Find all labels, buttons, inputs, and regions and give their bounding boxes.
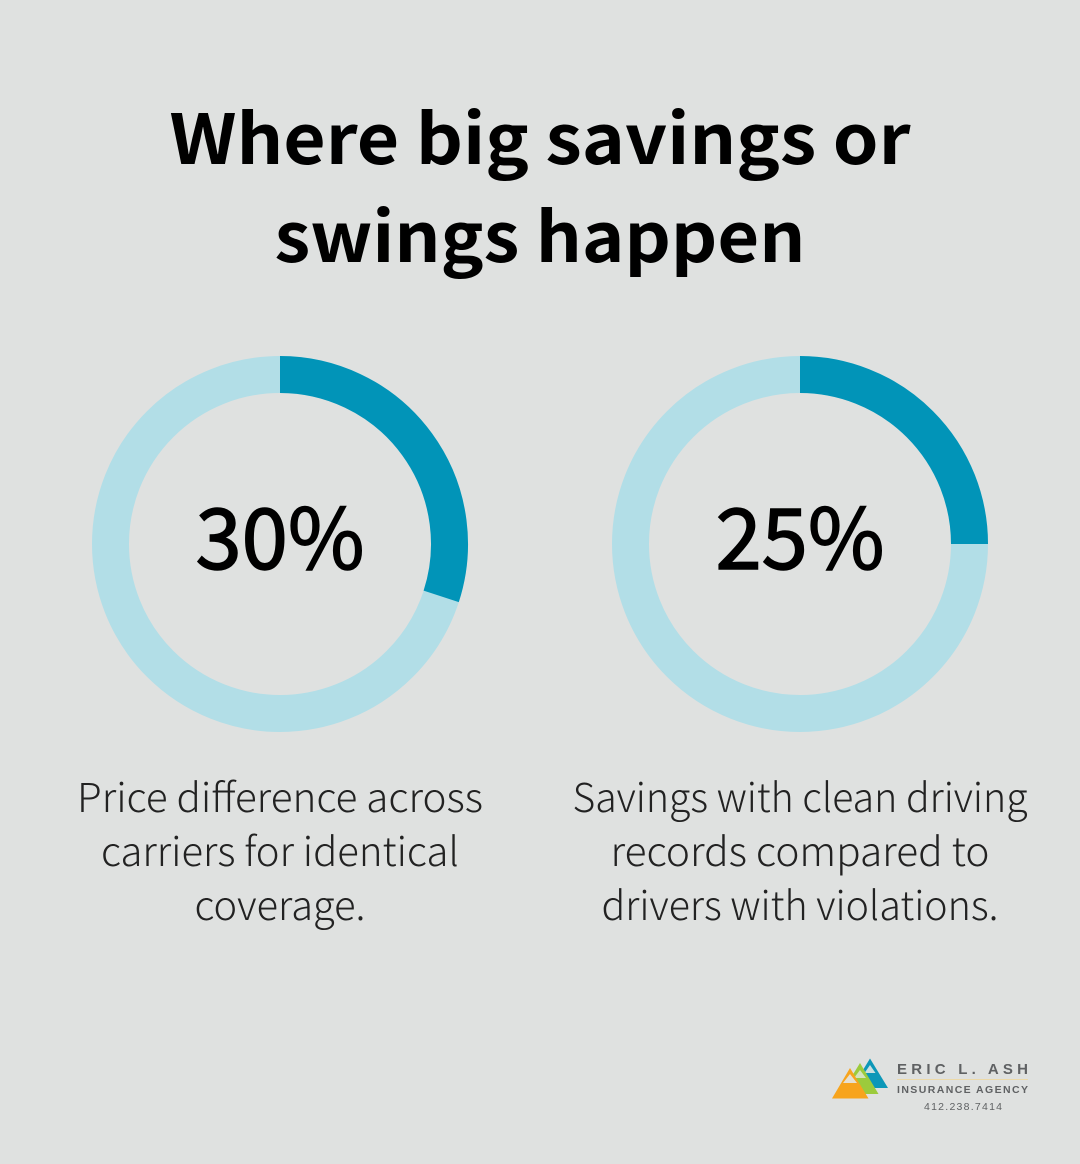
stat: 25%: 25% bbox=[716, 473, 884, 594]
description: clean driving savings bbox=[572, 766, 1028, 932]
panel: 25% clean driving savings bbox=[572, 374, 1028, 932]
description: price difference: carriers for identical bbox=[101, 820, 459, 878]
title: Where big savings or bbox=[170, 84, 911, 184]
description: clean driving savings: Savings with clean driving bbox=[572, 766, 1028, 824]
icon: mountain triangles bbox=[832, 1058, 888, 1098]
logo phone: 412.238.7414 bbox=[924, 1101, 1002, 1113]
logo subtitle: INSURANCE AGENCY bbox=[897, 1084, 1028, 1096]
description: price difference bbox=[77, 766, 483, 932]
logo name: ERIC L. ASH bbox=[897, 1061, 1028, 1078]
description: clean driving savings: records compared to bbox=[610, 820, 990, 878]
title bbox=[170, 84, 911, 282]
description: price difference: Price difference across bbox=[77, 766, 483, 824]
donut chart: 25% bbox=[630, 374, 970, 714]
panel: 30% price difference bbox=[77, 374, 483, 932]
logo: Eric L. Ash Insurance Agency bbox=[832, 1058, 1028, 1113]
title: swings happen bbox=[274, 182, 806, 282]
description: clean driving savings: drivers with violations. bbox=[602, 874, 998, 932]
donut chart: 30% bbox=[110, 374, 450, 714]
description: price difference: coverage. bbox=[194, 874, 366, 932]
stat: 30%: 30% bbox=[196, 473, 364, 594]
